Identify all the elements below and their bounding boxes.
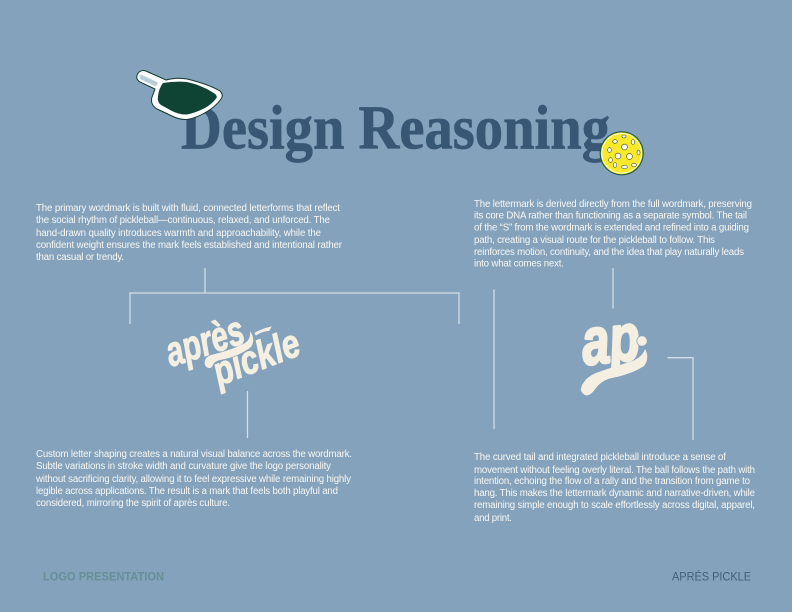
text block: custom letter shaping	[35, 449, 352, 509]
text block: lettermark derivation: of the “S” from the wordmark is extended and refined into a guiding	[474, 222, 749, 234]
icon: pickleball	[600, 132, 643, 175]
logo: ap lettermark	[578, 299, 647, 395]
text block: custom letter shaping: Custom letter shaping creates a natural visual balance across the wordmark.	[36, 449, 352, 460]
icon: pickleball paddle	[137, 70, 222, 120]
text block: custom letter shaping: without sacrificing clarity, allowing it to feel expressive while remaining highly	[35, 474, 351, 485]
footer: après pickle: APRÉS PICKLE	[672, 568, 751, 584]
text block: curved tail and pickleball	[474, 452, 755, 524]
connector: wordmark to lower text	[246, 391, 248, 438]
text block: lettermark derivation: into what comes next.	[474, 258, 564, 270]
text block: primary wordmark: confident weight ensures the mark feels established and intentional rather	[36, 240, 343, 251]
text block: primary wordmark: hand-drawn quality introduces warmth and approachability, while the	[36, 228, 321, 239]
bracket connector: wordmark	[130, 268, 459, 324]
text block: curved tail and pickleball: intention, echoing the flow of a rally and the transition from game to	[474, 476, 750, 487]
text block: custom letter shaping: considered, mirroring the spirit of après culture.	[36, 498, 230, 509]
text block: curved tail and pickleball: movement without feeling overly literal. The ball follows the path with	[474, 465, 755, 476]
text block: curved tail and pickleball: hang. This makes the lettermark dynamic and narrative-driven, while	[474, 488, 755, 499]
text block: lettermark derivation: its core DNA rather than functioning as a separate symbol. The tail	[474, 210, 747, 222]
text block: curved tail and pickleball: The curved tail and integrated pickleball introduce a sense of	[474, 452, 726, 463]
text block: primary wordmark: the social rhythm of pickleball—continuous, relaxed, and unforced. The	[36, 215, 330, 226]
divider line	[493, 290, 495, 429]
text block: lettermark derivation: The lettermark is derived directly from the full wordmark, preserving	[474, 199, 752, 210]
title: Design Reasoning	[181, 94, 610, 162]
text block: primary wordmark: than casual or trendy.	[36, 252, 124, 263]
footer: logo presentation: LOGO PRESENTATION	[43, 570, 164, 584]
text block: curved tail and pickleball: remaining simple enough to scale effortlessly across digital, apparel,	[474, 500, 755, 511]
logo: après pickle wordmark	[159, 306, 306, 395]
text block: lettermark derivation: path, creating a visual route for the pickleball to follow. This	[474, 235, 715, 246]
text block: lettermark derivation	[474, 199, 752, 270]
logo: ap lettermark: ap	[578, 299, 643, 379]
logo: après pickle wordmark: pickle	[206, 321, 306, 395]
text block: custom letter shaping: legible across applications. The result is a mark that feels both playful and	[36, 486, 338, 497]
text block: primary wordmark	[36, 203, 343, 263]
connector: elbow to lower text	[668, 358, 693, 440]
connector: lettermark to upper text	[612, 268, 614, 308]
text block: lettermark derivation: reinforces motion, continuity, and the idea that play naturally leads	[474, 247, 744, 258]
text block: curved tail and pickleball: and print.	[474, 513, 512, 524]
logo: après pickle wordmark: après	[159, 306, 250, 376]
text block: primary wordmark: The primary wordmark is built with fluid, connected letterforms that reflect	[36, 203, 340, 214]
text block: custom letter shaping: Subtle variations in stroke width and curvature give the logo personality	[36, 461, 331, 472]
